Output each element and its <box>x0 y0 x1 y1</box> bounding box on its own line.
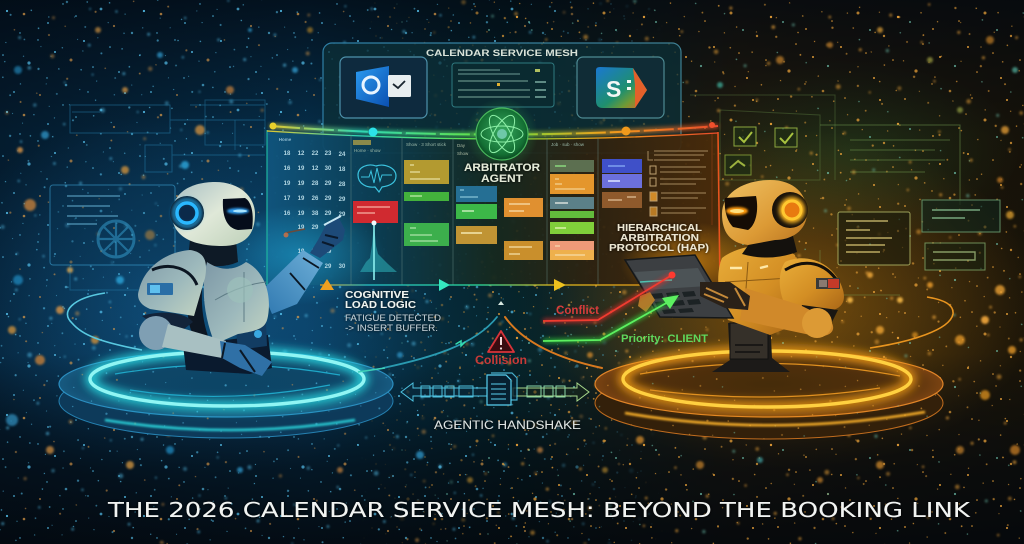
robot neck <box>188 240 238 266</box>
robot torso <box>718 245 800 335</box>
column headers: Home · show <box>354 148 381 153</box>
calendar day grid: 18 <box>339 167 346 173</box>
cognitive load logic label: -> INSERT BUFFER. <box>345 323 438 334</box>
tablet <box>625 255 733 318</box>
icon: brain pulse <box>358 165 396 192</box>
calendar day grid: 19 <box>298 225 305 231</box>
calendar day grid: 29 <box>325 181 332 187</box>
calendar day grid: 16 <box>284 166 291 172</box>
timeline nodes <box>270 122 715 136</box>
hierarchical arbitration protocol label: HIERARCHICAL <box>617 222 703 234</box>
calendar day grid: 12 <box>312 166 319 172</box>
icon: outlook logo <box>356 66 411 107</box>
calendar day grid: 22 <box>312 151 319 157</box>
icon: film wheel <box>98 221 134 257</box>
handshake line <box>388 409 608 411</box>
robot forearm <box>740 288 833 336</box>
cognitive load logic label: LOAD LOGIC <box>345 299 416 311</box>
calendar day grid: 16 <box>284 211 291 217</box>
robot neck <box>742 232 797 258</box>
heading: calendar service mesh: CALENDAR SERVICE MESH <box>426 48 578 59</box>
conflict arrow <box>543 272 676 321</box>
card: red alert <box>353 201 398 223</box>
label: conflict: Conflict <box>556 305 599 317</box>
calendar day grid: 29 <box>325 225 332 231</box>
collision warning <box>475 331 527 367</box>
collision warning: Collision <box>475 355 527 367</box>
column headers: Show <box>457 151 469 156</box>
robot shoulder <box>780 258 844 312</box>
calendar day grid: 19 <box>284 181 291 187</box>
calendar day grid: 28 <box>339 182 346 188</box>
calendar day grid: 28 <box>312 181 319 187</box>
cognitive load logic label: FATIGUE DETECTED <box>345 313 441 324</box>
robot head <box>172 182 255 246</box>
calendar day grid: 29 <box>325 264 332 270</box>
label: arbitrator agent: ARBITRATOR <box>464 162 540 174</box>
calendar day grid: 38 <box>312 211 319 217</box>
calendar day grid: 30 <box>325 166 332 172</box>
calendar day grid: Home <box>279 137 292 142</box>
robot shoulder <box>138 250 206 316</box>
icon: atom <box>476 108 528 160</box>
cognitive load logic label: COGNITIVE <box>345 289 409 301</box>
robot hands <box>700 282 750 310</box>
calendar day grid: 29 <box>325 196 332 202</box>
timeline arrow <box>320 279 720 291</box>
calendar day grid: 29 <box>325 249 332 255</box>
schedule cards <box>404 159 642 260</box>
calendar day grid: 23 <box>325 151 332 157</box>
calendar day grid: 19 <box>298 249 305 255</box>
calendar day grid: 12 <box>298 151 305 157</box>
column headers: Show · 3 Short stick <box>406 142 447 147</box>
robot left arm pointing <box>262 216 345 314</box>
cognitive load logic label <box>345 289 441 334</box>
calendar day grid: 19 <box>298 211 305 217</box>
tile: outlook <box>340 57 427 118</box>
calendar day grid: 26 <box>312 196 319 202</box>
panel: calendar board <box>215 122 760 305</box>
robot head <box>722 180 807 245</box>
background panels left <box>50 100 265 290</box>
label: agentic handshake: AGENTIC HANDSHAKE <box>434 420 581 432</box>
platform: right <box>595 297 953 439</box>
robot visor <box>725 196 757 230</box>
icon: document <box>487 373 517 405</box>
robot visor <box>223 198 253 230</box>
priority arrow <box>543 295 708 345</box>
calendar day grid: 19 <box>298 166 305 172</box>
hierarchical arbitration protocol label: ARBITRATION <box>620 232 699 244</box>
icon: warning triangle <box>488 331 514 352</box>
calendar day grid: 29 <box>339 197 346 203</box>
label: arbitrator agent <box>464 162 540 185</box>
calendar day grid: 19 <box>298 196 305 202</box>
hierarchical arbitration protocol label: PROTOCOL (HAP) <box>609 242 709 254</box>
robot lower body <box>712 318 790 372</box>
card: sync status <box>452 63 554 107</box>
arbitrator agent <box>464 98 540 185</box>
calendar day grid: 19 <box>298 181 305 187</box>
calendar day grid: 24 <box>339 152 346 158</box>
agentic handshake arrow <box>401 373 589 405</box>
robot lower body <box>183 335 272 374</box>
calendar day grid: 29 <box>312 249 319 255</box>
platform: left <box>59 293 393 438</box>
main title: THE 2026 CALENDAR SERVICE MESH: BEYOND THE BOOKING LINK <box>107 498 971 522</box>
column headers <box>353 140 585 156</box>
icon: s app logo: S <box>606 76 621 102</box>
left data panel <box>50 185 175 265</box>
icon panels with checkmarks <box>725 127 797 175</box>
hierarchical arbitration protocol label <box>609 222 709 254</box>
robot: blue <box>138 182 345 376</box>
panel: calendar service mesh <box>323 43 681 153</box>
robot forearm and hand <box>142 313 193 340</box>
pulse spike chart <box>360 220 397 280</box>
collision curves <box>383 301 602 368</box>
label: arbitrator agent: AGENT <box>481 173 523 185</box>
calendar day grid <box>279 137 346 270</box>
tile: s app <box>577 57 664 118</box>
column headers: Day <box>457 143 466 148</box>
calendar day grid: 29 <box>312 225 319 231</box>
robot torso <box>204 262 269 344</box>
calendar day grid: 17 <box>284 196 291 202</box>
calendar day grid: 29 <box>325 211 332 217</box>
calendar day grid: 18 <box>284 151 291 157</box>
column headers: Job · sub · show <box>551 142 585 147</box>
task checklist <box>648 151 708 216</box>
robot: orange <box>625 180 844 372</box>
background panels right <box>690 95 1000 295</box>
label: priority client: Priority: CLIENT <box>621 333 708 345</box>
right data panel <box>838 212 910 265</box>
calendar day grid: 30 <box>339 264 346 270</box>
calendar day grid: 29 <box>339 212 346 218</box>
